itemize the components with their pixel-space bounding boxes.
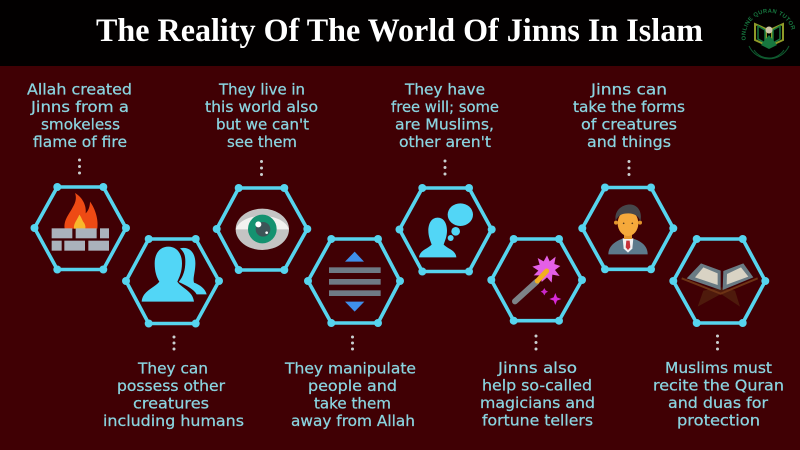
text: magicians: magicians and bbox=[480, 394, 595, 412]
column 5: free will bbox=[391, 80, 499, 276]
dots bbox=[260, 160, 263, 176]
icon: thinking person bbox=[419, 203, 473, 257]
text: protection: protection bbox=[677, 412, 760, 430]
text: possession bbox=[103, 360, 244, 430]
text: smokeless fire bbox=[27, 80, 132, 151]
text: protection: and duas for bbox=[668, 394, 769, 412]
text: possession: They can bbox=[137, 360, 208, 378]
logo: Online Quran Tutor bbox=[742, 8, 796, 60]
text: free will: are Muslims, bbox=[395, 116, 494, 134]
dots bbox=[628, 160, 630, 176]
icon: open Quran on stand bbox=[682, 263, 758, 307]
text: unseen: but we can't bbox=[216, 116, 309, 134]
text: free will: free will; some bbox=[391, 98, 499, 116]
text: unseen: this world also bbox=[205, 98, 318, 116]
header band bbox=[0, 0, 800, 66]
icon: eye bbox=[236, 209, 289, 250]
column 6: magicians bbox=[480, 235, 595, 430]
text: manipulation bbox=[284, 360, 416, 430]
icon: up and down arrows with bars bbox=[329, 252, 381, 312]
text: manipulation: people and bbox=[308, 377, 397, 395]
column 1: fire bbox=[27, 80, 132, 274]
text: forms: of creatures bbox=[581, 116, 677, 134]
hexagon bbox=[578, 184, 677, 273]
hexagon bbox=[30, 183, 130, 274]
text: unseen: see them bbox=[227, 133, 297, 151]
text: magicians: Jinns also bbox=[497, 359, 577, 377]
dots bbox=[534, 334, 538, 350]
dots bbox=[78, 158, 81, 174]
text: manipulation: away from Allah bbox=[291, 412, 415, 430]
hexagon bbox=[669, 235, 769, 327]
dots bbox=[172, 336, 176, 350]
text: forms: and things bbox=[587, 133, 671, 151]
column 3: unseen bbox=[205, 80, 318, 274]
text: unseen: They live in bbox=[218, 80, 305, 98]
hexagon bbox=[304, 235, 404, 327]
text: protection: Muslims must bbox=[665, 359, 772, 377]
text: forms bbox=[573, 80, 685, 151]
icon: magic wand bbox=[515, 255, 561, 305]
text: possession: including humans bbox=[103, 412, 244, 430]
dots bbox=[351, 336, 354, 350]
text: magicians bbox=[480, 359, 595, 430]
text: forms: Jinns can bbox=[590, 80, 667, 98]
hexagon bbox=[122, 235, 223, 328]
text: magicians: fortune tellers bbox=[482, 412, 593, 430]
dots bbox=[716, 334, 719, 350]
column 2: possession bbox=[103, 235, 244, 430]
text: smokeless fire: flame of fire bbox=[33, 133, 127, 151]
text: manipulation: take them bbox=[314, 394, 391, 412]
text: protection: recite the Quran bbox=[653, 376, 784, 394]
title: The Reality Of The World Of Jinns In Islam bbox=[96, 13, 703, 49]
icon: man in suit bbox=[608, 204, 648, 254]
text: smokeless fire: Allah created bbox=[27, 80, 132, 98]
hexagon bbox=[396, 184, 496, 276]
text: forms: take the forms bbox=[573, 98, 685, 116]
hexagon bbox=[213, 184, 311, 274]
text: free will: other aren't bbox=[399, 133, 491, 151]
logo: Online Quran Tutor: ONLINE QURAN TUTOR bbox=[742, 8, 796, 40]
column 8: Quran bbox=[653, 235, 784, 430]
text: unseen bbox=[205, 80, 318, 151]
text: possession: possess other bbox=[117, 377, 226, 395]
icon: fire over brick wall bbox=[52, 193, 109, 251]
column 4: manipulation bbox=[284, 235, 416, 430]
text: free will bbox=[391, 80, 499, 151]
text: possession: creatures bbox=[133, 394, 209, 412]
icon: two people bbox=[142, 247, 207, 302]
text: free will: They have bbox=[404, 80, 485, 98]
text: smokeless fire: Jinns from a bbox=[30, 98, 129, 116]
column 7: forms bbox=[573, 80, 685, 273]
dots bbox=[444, 160, 446, 176]
text: manipulation: They manipulate bbox=[284, 360, 416, 378]
text: smokeless fire: smokeless bbox=[41, 116, 120, 134]
text: magicians: help so-called bbox=[482, 376, 592, 394]
hexagon bbox=[487, 235, 586, 325]
text: protection bbox=[653, 359, 784, 430]
